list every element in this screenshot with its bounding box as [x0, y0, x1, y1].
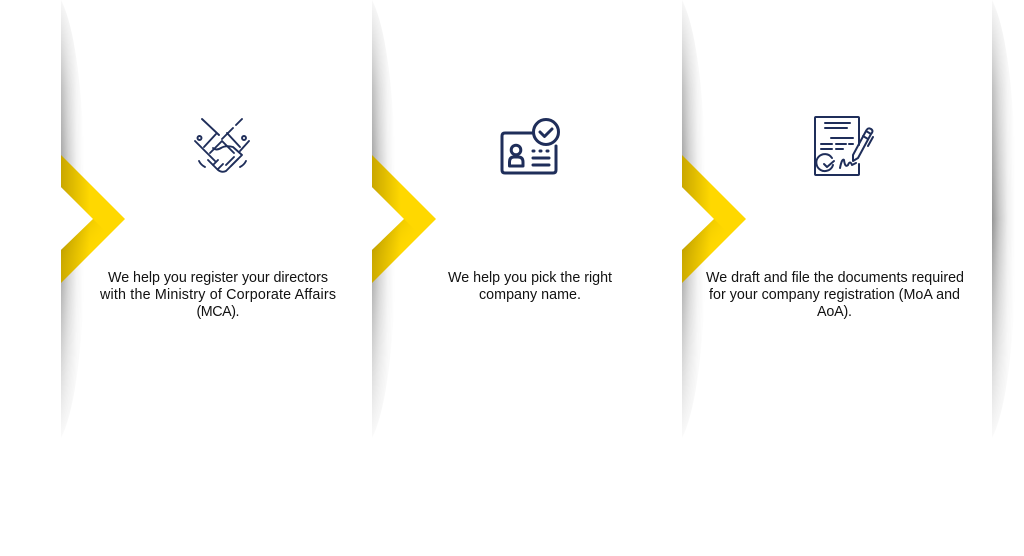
text: step 1 description: with the Ministry of Corporate Affairs [99, 287, 336, 303]
icon: signed document with pen [815, 117, 873, 175]
icon: handshake [195, 119, 249, 172]
text: step 2 description: company name. [479, 287, 581, 303]
text: step 1 description [99, 270, 336, 320]
text: step 3 description: We draft and file the documents required [706, 270, 964, 286]
right edge shadow [992, 0, 1016, 438]
text: step 1 description: We help you register your directors [108, 270, 328, 286]
text: step 1 description: (MCA). [196, 304, 240, 320]
panel: step 2 shadow and chevron [372, 0, 436, 438]
text: step 2 description [448, 270, 612, 303]
icon: id card with check badge [502, 120, 558, 173]
text: step 3 description: AoA). [817, 304, 852, 320]
panel: step 1 shadow and chevron [61, 0, 125, 438]
panel: step 3 shadow and chevron [682, 0, 746, 438]
text: step 2 description: We help you pick the right [448, 270, 612, 286]
text: step 3 description [706, 270, 964, 320]
text: step 3 description: for your company registration (MoA and [709, 287, 960, 303]
